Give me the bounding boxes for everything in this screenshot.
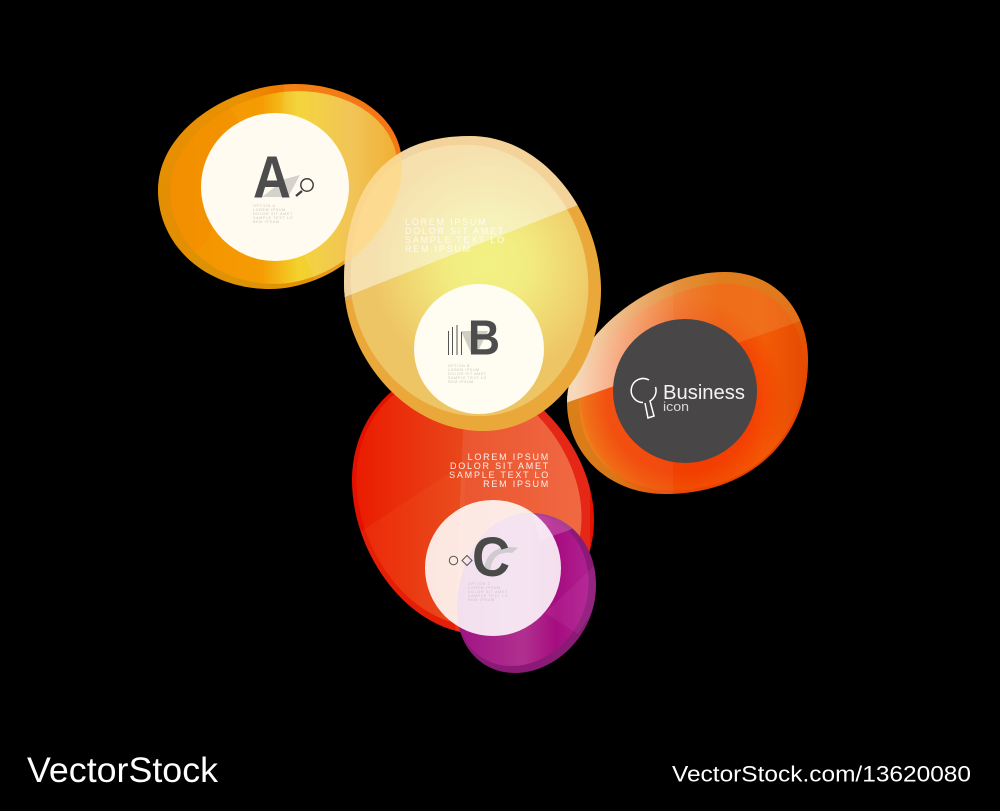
blob: purple body [457,513,596,673]
circle: B badge [414,284,544,414]
heading: letter A: A [253,144,291,210]
text: option B: DOLOR SIT AMET [448,372,487,376]
icon: circle and diamond [449,556,472,566]
panel: A blob [158,84,401,289]
text: option A: SAMPLE TEXT LO [253,216,293,220]
text: option B [448,364,487,384]
blob: amber body [158,84,401,289]
text: option A: OPTION A [253,204,276,208]
circle: dark badge [613,319,757,463]
text: lorem ipsum C [449,452,550,489]
text: lorem ipsum C: LOREM IPSUM [468,452,550,462]
text: option A: DOLOR SIT AMET [253,212,293,216]
text: lorem ipsum C: REM IPSUM [483,479,550,489]
blob: yellow body [344,136,601,431]
text: option A: REM IPSUM [253,220,280,224]
blob: orange body [567,272,808,494]
text: option B: OPTION B [448,364,470,368]
text: option C: LOREM IPSUM [468,586,501,590]
text: icon: icon [663,400,689,414]
panel: C blob [352,392,594,632]
text: lorem ipsum C: DOLOR SIT AMET [450,461,550,471]
text: lorem ipsum B [405,217,506,254]
text: option C: SAMPLE TEXT LO [468,594,508,598]
watermark: image URL: VectorStock.com/13620080 [672,762,971,786]
text: lorem ipsum C: SAMPLE TEXT LO [449,470,550,480]
watermark: VectorStock logo: VectorStock [27,751,219,790]
text: option C: OPTION C [468,582,491,586]
blob: red body [352,392,594,632]
text: option B: REM IPSUM [448,380,474,384]
icon: vertical bars [448,325,462,355]
icon: letter shadow [461,331,488,355]
heading: letter C: C [472,525,510,588]
panel: business blob [567,272,808,494]
text: option A [253,204,293,224]
circle: C badge [425,500,561,636]
text: option C [468,582,508,602]
panel: C badge [425,500,561,636]
text: lorem ipsum B: REM IPSUM [405,244,472,254]
text: lorem ipsum B: LOREM IPSUM [405,217,487,227]
circle: A badge [201,113,349,261]
text: Business: Business [663,381,745,404]
icon: letter shadow [262,175,300,197]
icon: letter shadow [484,547,518,576]
text: lorem ipsum B: SAMPLE TEXT LO [405,235,506,245]
icon: key-like magnifier [631,379,656,418]
icon: magnifier [296,179,313,196]
text: option A: LOREM IPSUM [253,208,286,212]
text: option C: DOLOR SIT AMET [468,590,508,594]
heading: letter B: B [468,311,500,365]
text: option C: REM IPSUM [468,598,495,602]
text: option B: LOREM IPSUM [448,368,480,372]
text: lorem ipsum B: DOLOR SIT AMET [405,226,505,236]
text: option B: SAMPLE TEXT LO [448,376,487,380]
panel: B blob [344,136,601,431]
panel: purple blob [457,513,596,673]
